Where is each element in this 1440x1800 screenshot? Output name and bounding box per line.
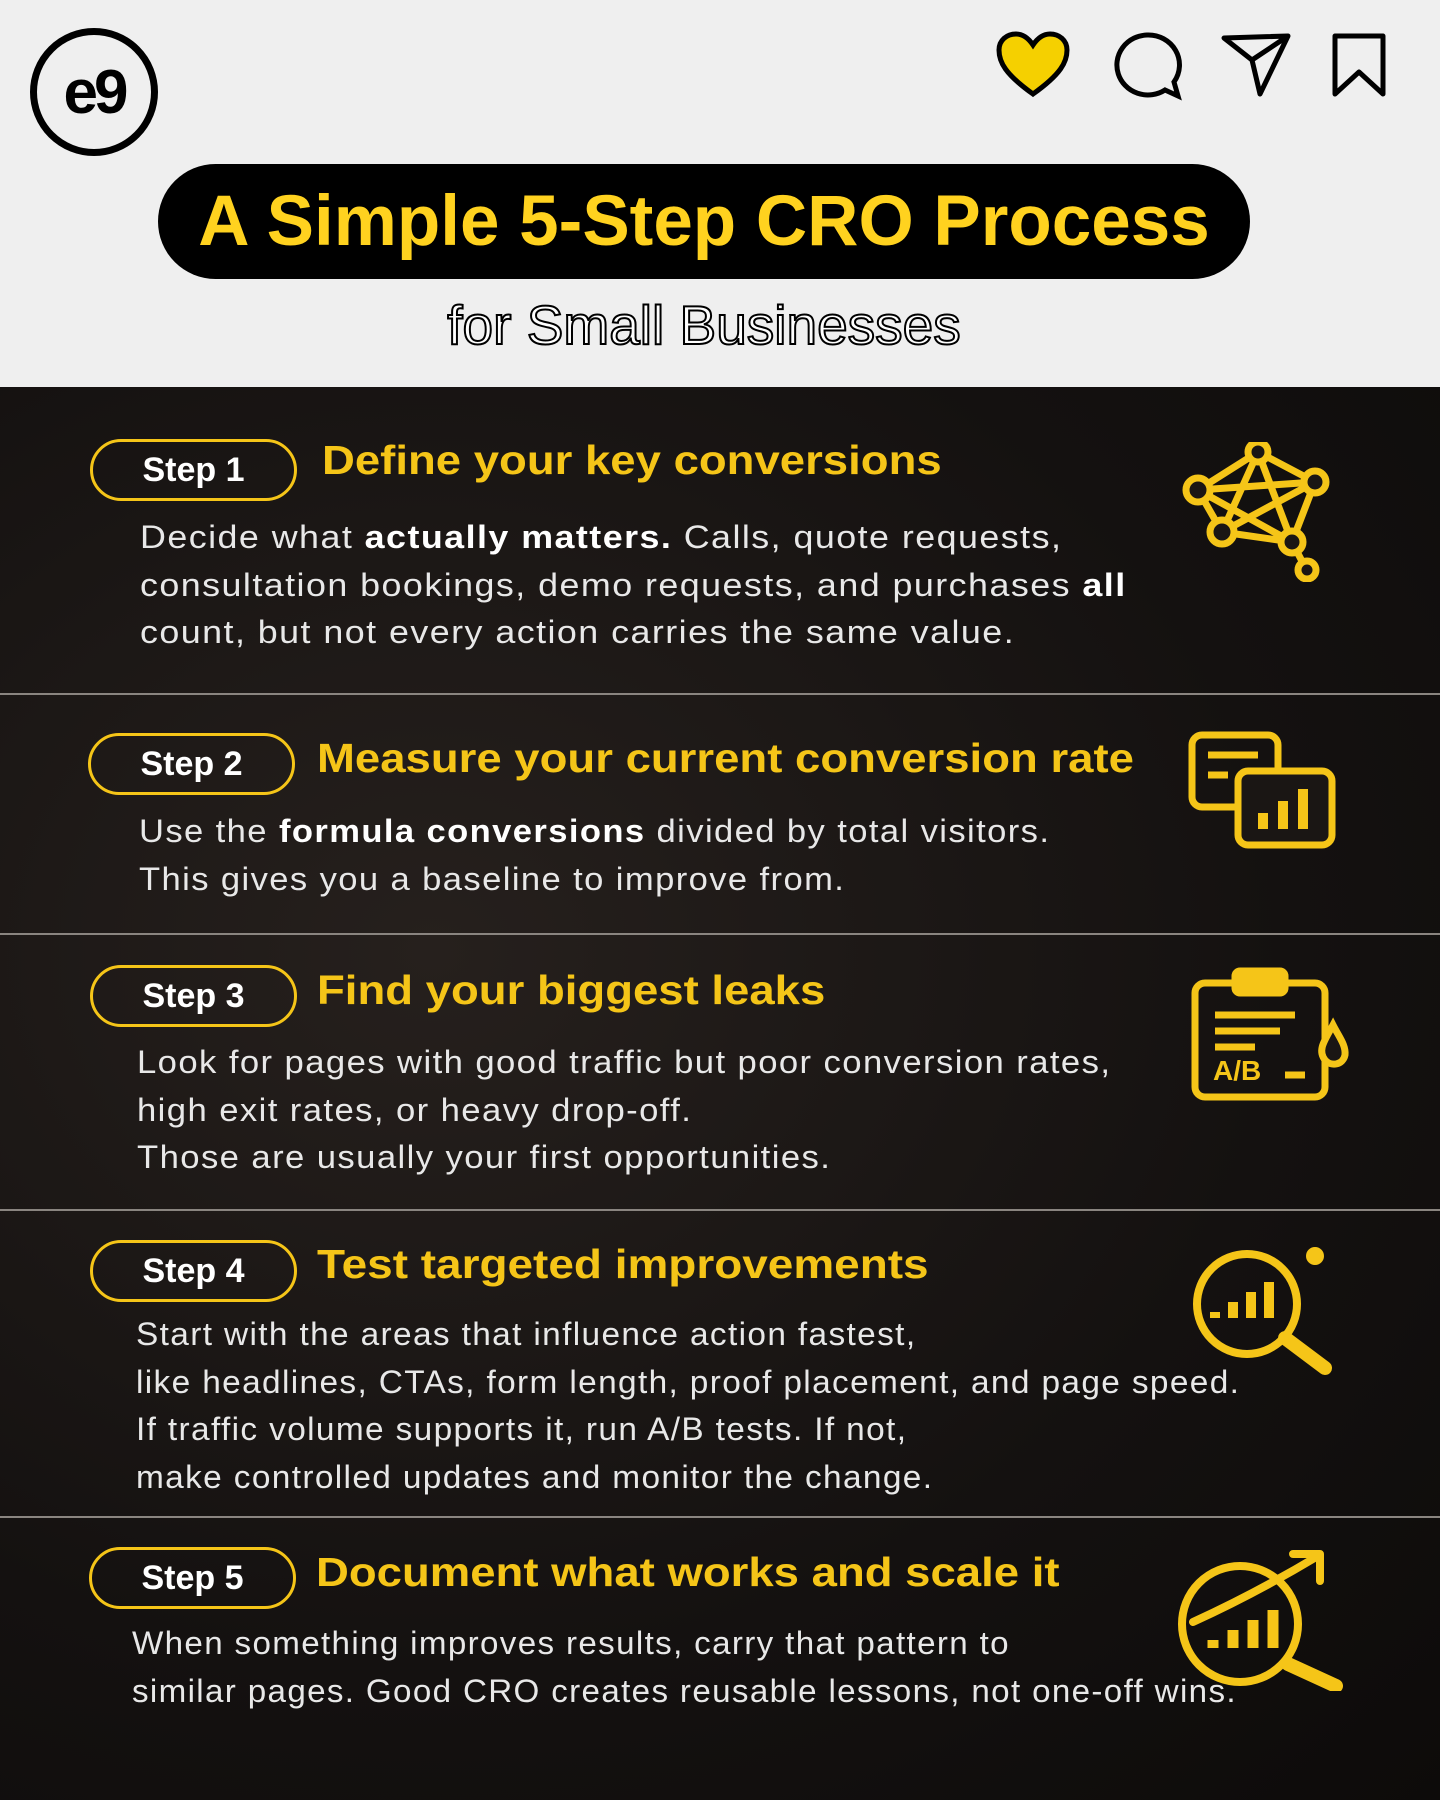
step 3 body: high exit rates, or heavy drop-off. <box>137 1092 692 1128</box>
icon: network <box>1182 442 1330 582</box>
step 1 body: consultation bookings, demo requests, and purchases all <box>140 566 1127 602</box>
step 5 body: similar pages. Good CRO creates reusable lessons, not one-off wins. <box>132 1672 1237 1708</box>
step 3 body <box>137 1044 1111 1175</box>
step 3 pill: Step 3 <box>142 976 245 1014</box>
step 4 body: like headlines, CTAs, form length, proof placement, and page speed. <box>136 1364 1240 1400</box>
panel: step 2 <box>88 732 1336 896</box>
step 3 pill <box>90 965 297 1027</box>
icon: charts <box>1188 732 1336 848</box>
step 1 pill <box>90 439 297 501</box>
step 3 body: Look for pages with good traffic but poor conversion rates, <box>137 1044 1111 1080</box>
step 4 body: make controlled updates and monitor the change. <box>136 1458 933 1494</box>
step 5 body: When something improves results, carry that pattern to <box>132 1625 1010 1661</box>
step 3 body: Those are usually your first opportunities. <box>137 1139 831 1175</box>
step 2 pill: Step 2 <box>140 744 243 782</box>
step 4 body: If traffic volume supports it, run A/B tests. If not, <box>136 1411 907 1447</box>
step 1 body <box>140 519 1127 650</box>
step 5 pill <box>89 1547 296 1609</box>
step 5 pill: Step 5 <box>141 1558 244 1596</box>
step 2 body: This gives you a baseline to improve from. <box>139 860 845 896</box>
dark panel <box>0 387 1440 1800</box>
panel: step 3 <box>90 965 1349 1175</box>
title <box>158 164 1250 279</box>
icon: send <box>1222 34 1290 96</box>
icon: magnifier chart <box>1193 1247 1332 1375</box>
icon: clipboard A/B: A/B <box>1213 1055 1261 1086</box>
step 2 heading: Measure your current conversion rate <box>317 735 1134 781</box>
step 5 heading: Document what works and scale it <box>316 1549 1060 1595</box>
step 4 body: Start with the areas that influence action fastest, <box>136 1316 916 1352</box>
step 4 pill <box>90 1240 297 1302</box>
logo: e9 <box>64 58 124 126</box>
icon: growth magnifier <box>1178 1550 1343 1691</box>
step 2 body: Use the formula conversions divided by total visitors. <box>139 813 1050 849</box>
step 2 pill <box>88 733 295 795</box>
icon: heart <box>996 32 1070 98</box>
step 4 body <box>136 1316 1240 1494</box>
icon: clipboard A/B <box>1192 968 1349 1100</box>
step 1 body: count, but not every action carries the same value. <box>140 614 1015 650</box>
step 4 pill: Step 4 <box>142 1252 245 1290</box>
title: A Simple 5-Step CRO Process <box>198 182 1210 261</box>
step 1 heading: Define your key conversions <box>322 437 942 483</box>
step 4 heading: Test targeted improvements <box>317 1241 929 1287</box>
icon: comment <box>1114 32 1182 100</box>
step 2 body <box>139 813 1050 896</box>
step 5 body <box>132 1625 1237 1708</box>
step 1 body: Decide what actually matters. Calls, quote requests, <box>140 519 1062 555</box>
panel: step 1 <box>90 437 1330 650</box>
subtitle: for Small Businesses <box>447 294 961 356</box>
step 3 heading: Find your biggest leaks <box>317 967 825 1013</box>
panel: step 4 <box>90 1240 1332 1494</box>
icon: bookmark <box>1332 34 1386 96</box>
step 1 pill: Step 1 <box>142 450 245 488</box>
logo <box>30 28 158 156</box>
panel: step 5 <box>89 1547 1343 1708</box>
